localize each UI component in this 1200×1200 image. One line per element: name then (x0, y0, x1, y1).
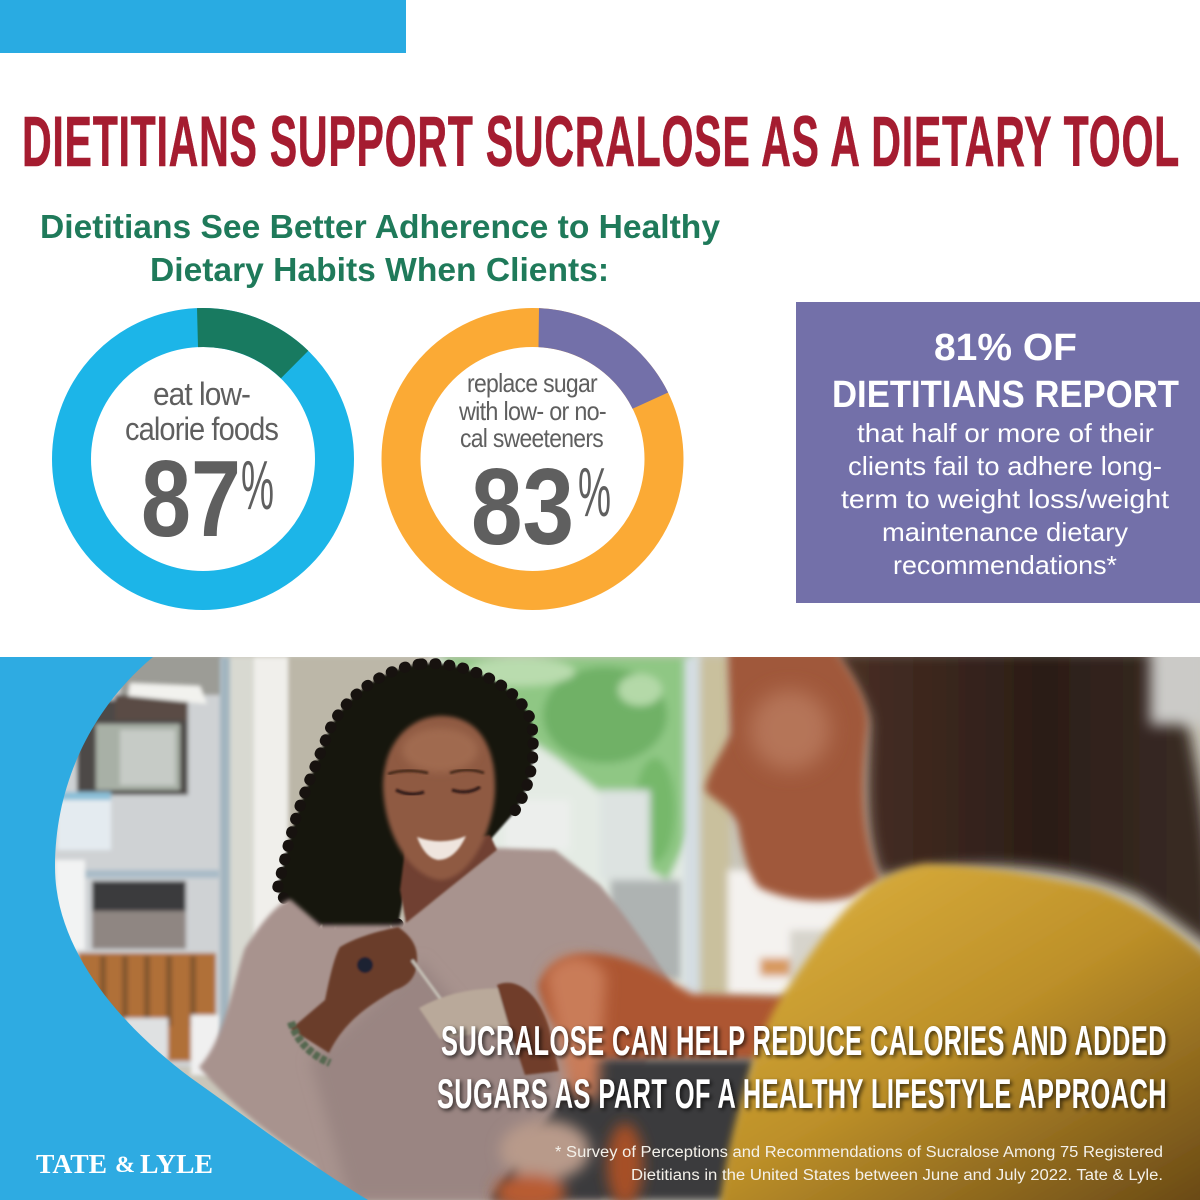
donut chart: replace sugar with low- or no-cal sweeteners 83%: replace sugar (467, 368, 598, 398)
woman: sweater (199, 848, 672, 1200)
donut chart: replace sugar with low- or no-cal sweeteners 83%: with low- or no- (458, 396, 606, 426)
donut chart: replace sugar with low- or no-cal sweeteners 83% (401, 308, 668, 590)
woman: arm, hand, ring, bracelet and bowl (291, 927, 559, 1075)
donut chart: eat low-calorie foods 87% (72, 308, 334, 590)
person in foreground: hair (830, 650, 1200, 950)
top accent bar (0, 0, 406, 53)
window view: trees (432, 657, 700, 1007)
footnote (555, 1144, 1163, 1184)
panel: 81% of dietitians report: that half or more of their (857, 418, 1154, 448)
person in foreground: hand and arm (538, 954, 790, 1060)
woman: neck and face (400, 835, 497, 923)
logo: Tate & Lyle: LYLE (140, 1149, 213, 1179)
person in foreground: face (705, 650, 880, 901)
donut chart: replace sugar with low- or no-cal sweeteners 83%: % (578, 453, 611, 531)
panel: 81% of dietitians report: clients fail to adhere long- (848, 451, 1162, 481)
donut chart: eat low-calorie foods 87%: 87 (141, 438, 241, 560)
logo: Tate & Lyle: TATE (36, 1149, 107, 1179)
window frame right (684, 657, 868, 997)
footnote: Dietitians in the United States between June and July 2022. Tate & Lyle. (631, 1167, 1163, 1184)
window frame and wall (220, 657, 438, 1057)
panel: 81% of dietitians report: recommendations* (893, 550, 1117, 580)
panel: 81% of dietitians report: term to weight loss/weight (841, 484, 1170, 514)
donut chart: replace sugar with low- or no-cal sweeteners 83%: cal sweeteners (460, 423, 604, 453)
donut chart: eat low-calorie foods 87%: % (241, 446, 274, 524)
logo: Tate & Lyle (36, 1149, 213, 1179)
window view: building (40, 655, 225, 1075)
panel: 81% of dietitians report (796, 302, 1200, 603)
panel: 81% of dietitians report: maintenance dietary (882, 517, 1128, 547)
footnote: * Survey of Perceptions and Recommendations of Sucralose Among 75 Registered (555, 1144, 1163, 1161)
person in foreground: yellow shirt (719, 864, 1200, 1200)
logo: Tate & Lyle: & (115, 1152, 135, 1177)
donut chart: replace sugar with low- or no-cal sweeteners 83%: 83 (471, 446, 574, 568)
subheading: Dietitians See Better Adherence to Healthy (40, 208, 721, 245)
blue curved panel (0, 657, 368, 1200)
donut chart: eat low-calorie foods 87%: eat low- (153, 376, 250, 412)
subheading (40, 208, 721, 288)
panel: 81% of dietitians report: 81% OF (934, 327, 1077, 369)
photo caption headline (437, 1017, 1167, 1117)
person in foreground: dark jeans (490, 1060, 755, 1200)
woman: curly hair (277, 664, 533, 930)
subheading: Dietary Habits When Clients: (150, 251, 609, 288)
foreground glass and bowl (494, 956, 643, 1200)
donut chart: eat low-calorie foods 87%: calorie foods (125, 411, 278, 447)
photo: two women eating from bowls by a window (0, 640, 1200, 1200)
